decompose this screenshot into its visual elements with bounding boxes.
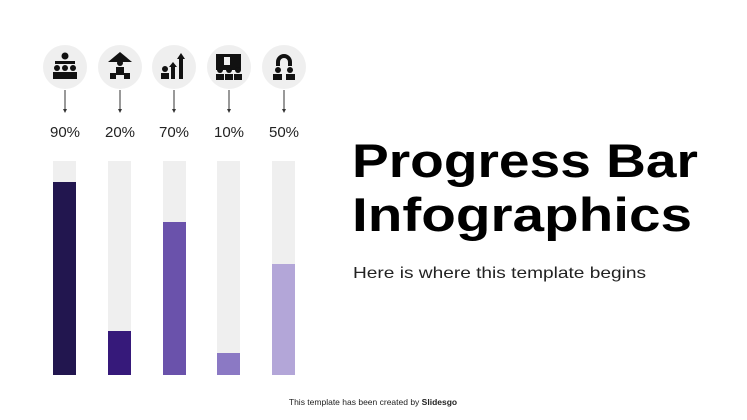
percentages	[50, 124, 299, 141]
title: Progress Bar	[352, 134, 698, 187]
icon: magnet people	[262, 45, 306, 89]
bar chart	[53, 161, 295, 375]
title: Infographics	[352, 188, 692, 241]
icon: growth arrows	[152, 45, 196, 89]
arrows	[63, 90, 286, 113]
percentages: 50%	[269, 124, 299, 141]
percentages: 70%	[159, 124, 189, 141]
percentages: 90%	[50, 124, 80, 141]
footer: This template has been created by Slidesgo	[289, 397, 457, 407]
icon: house leader	[98, 45, 142, 89]
percentages: 10%	[214, 124, 244, 141]
icon: team meeting	[43, 45, 87, 89]
percentages: 20%	[105, 124, 135, 141]
title	[352, 134, 698, 241]
icon: presentation	[207, 45, 251, 89]
subtitle: Here is where this template begins	[353, 265, 646, 282]
